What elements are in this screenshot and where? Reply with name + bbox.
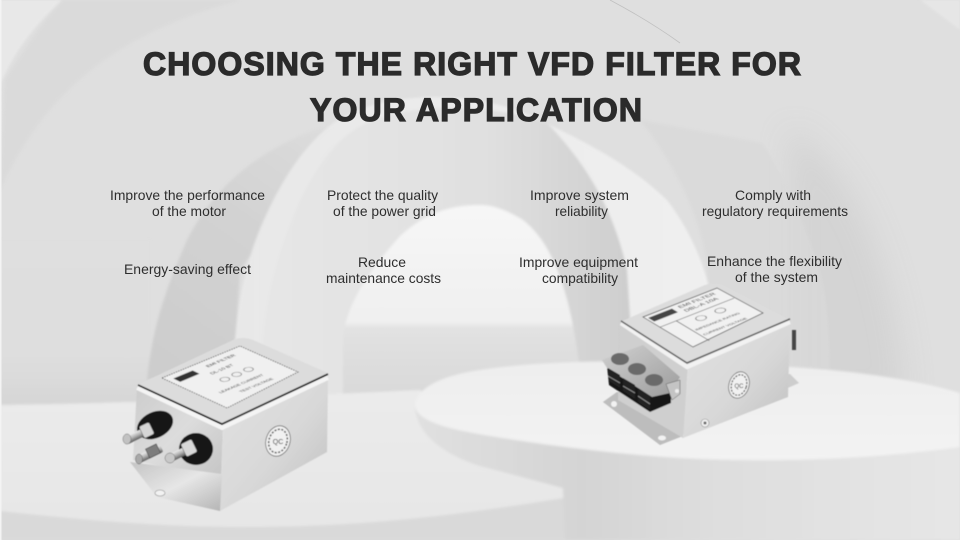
- big arch: [147, 125, 345, 380]
- QC seal: [725, 369, 753, 401]
- terminal: ground stud: [136, 444, 163, 464]
- title: [143, 46, 801, 128]
- product photo: right EMI filter with terminal block: CURRENT VOLTAGE: [702, 317, 749, 336]
- benefit: improve system reliability: reliability: [555, 203, 608, 219]
- benefit: improve equipment compatibility: Improve equipment: [519, 254, 638, 270]
- floor and lower front: [0, 390, 570, 540]
- benefit: energy-saving effect: Energy-saving effect: [124, 261, 251, 277]
- benefit: comply with regulatory requirements: regulatory requirements: [702, 203, 848, 219]
- benefit: improve equipment compatibility: [519, 254, 638, 286]
- product photo: left EMI filter with stud terminals: DL-10 BT: [209, 363, 237, 375]
- terminal: upper left stud: [123, 405, 178, 445]
- benefit: comply with regulatory requirements: Comply with: [735, 187, 811, 203]
- benefit: improve system reliability: [530, 187, 629, 219]
- QC seal: QC: [273, 439, 283, 446]
- benefit: protect the quality of the power grid: Protect the quality: [327, 187, 438, 203]
- benefit: improve the performance of the motor: Improve the performance: [110, 187, 265, 203]
- product photo: left EMI filter with stud terminals: [123, 338, 330, 511]
- benefit: reduce maintenance costs: Reduce: [358, 254, 406, 270]
- disc side: [415, 405, 960, 540]
- benefit: enhance the flexibility of the system: [707, 253, 842, 285]
- QC seal: QC: [734, 384, 744, 390]
- benefit: enhance the flexibility of the system: Enhance the flexibility: [707, 253, 842, 269]
- product photo: left EMI filter with stud terminals: LEAKAGE CURRENT: [217, 373, 265, 394]
- benefit: comply with regulatory requirements: [702, 187, 848, 219]
- title: CHOOSING THE RIGHT VFD FILTER FOR: [143, 46, 801, 82]
- benefit: protect the quality of the power grid: of the power grid: [333, 203, 436, 219]
- benefit: enhance the flexibility of the system: of the system: [735, 269, 818, 285]
- product photo: right EMI filter with terminal block: IMPEDANCE RATING: [694, 312, 741, 331]
- benefit: improve equipment compatibility: compatibility: [542, 270, 618, 286]
- terminal block: [602, 345, 680, 412]
- ground screw: [701, 419, 709, 427]
- product photo: right EMI filter with terminal block: [602, 284, 799, 445]
- benefit: reduce maintenance costs: [326, 254, 441, 286]
- terminal: lower right stud: [165, 433, 213, 465]
- disc top: [415, 361, 960, 460]
- product photo: left EMI filter with stud terminals: EMI FILTER: [205, 354, 238, 368]
- product photo: right EMI filter with terminal block: EMI FILTER: [676, 292, 718, 309]
- product photo: right EMI filter with terminal block: DBL-A 10A: [682, 297, 721, 313]
- benefit: improve the performance of the motor: of the motor: [152, 203, 226, 219]
- title: YOUR APPLICATION: [310, 92, 642, 128]
- benefit: reduce maintenance costs: maintenance costs: [326, 270, 441, 286]
- benefit: improve the performance of the motor: [110, 187, 265, 219]
- product photo: left EMI filter with stud terminals: TEST VOLTAGE: [238, 377, 275, 393]
- QC seal: [262, 423, 294, 459]
- benefit: improve system reliability: Improve system: [530, 187, 629, 203]
- benefit: protect the quality of the power grid: [327, 187, 438, 219]
